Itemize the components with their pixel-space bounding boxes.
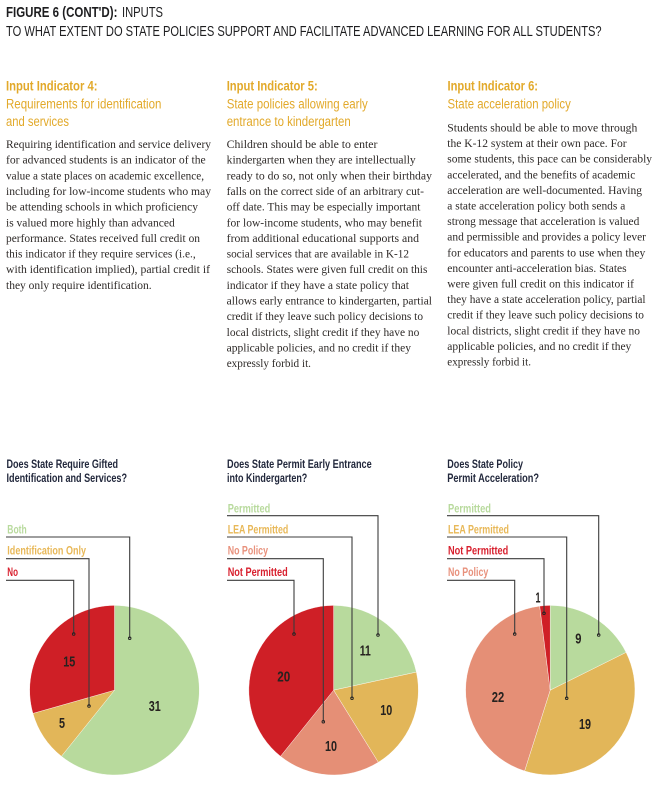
legend: gifted identification: Both <box>7 525 27 537</box>
text block: indicator 5 description: applicable policies, and no credit if they <box>227 342 411 354</box>
text block: indicator 6 description: strong message that acceleration is valued <box>447 216 640 228</box>
text block: indicator 6 description: for educators and parents to use when they <box>447 247 646 259</box>
pie chart: gifted identification <box>30 605 199 775</box>
heading: indicator 6: Input Indicator 6: <box>448 79 538 94</box>
values: acceleration policy: 9 <box>575 630 581 648</box>
text block: indicator 5 description: expressly forbid it. <box>227 358 311 370</box>
text block: indicator 5 description: schools. States were given full credit on this <box>227 264 428 276</box>
heading: indicator 6 <box>448 79 571 111</box>
pie chart: early entrance <box>249 605 418 775</box>
text block: indicator 6 description: acceleration are well-documented. Having <box>447 185 642 197</box>
text block: indicator 6 description: the K-12 system at their own pace. For <box>447 138 627 150</box>
legend: acceleration policy: Not Permitted <box>448 546 508 558</box>
text block: indicator 4 description: is valued more highly than advanced <box>6 217 175 229</box>
heading: indicator 4: Input Indicator 4: <box>6 79 98 94</box>
heading: indicator 6: State acceleration policy <box>448 96 571 111</box>
values: acceleration policy: 22 <box>492 689 504 706</box>
chart title: acceleration policy: Permit Acceleration? <box>447 473 539 485</box>
text block: indicator 6 description <box>447 122 652 368</box>
title: FIGURE 6 (CONT'D): <box>6 5 117 21</box>
text block: indicator 5 description: for low-income students, who may benefit <box>227 217 423 229</box>
chart title: acceleration policy: Does State Policy <box>447 459 523 471</box>
text block: indicator 4 description: this indicator if they require services (i.e., <box>6 249 196 261</box>
text block: indicator 4 description: for advanced students is an indicator of the <box>6 155 206 167</box>
chart title: early entrance: into Kindergarten? <box>227 473 307 485</box>
legend: gifted identification: No <box>7 567 18 579</box>
values: early entrance: 10 <box>380 702 392 719</box>
text block: indicator 4 description: performance. States received full credit on <box>6 233 200 245</box>
values: acceleration policy: 1 <box>536 590 540 606</box>
title: INPUTS <box>122 5 163 21</box>
heading: indicator 4: and services <box>6 114 69 129</box>
legend: acceleration policy: LEA Permitted <box>448 525 509 537</box>
text block: indicator 4 description: Requiring identification and service delivery <box>6 139 211 151</box>
text block: indicator 6 description: were given full credit on this indicator if <box>447 278 634 290</box>
values: gifted identification: 5 <box>59 715 65 732</box>
text block: indicator 5 description: social services that are available in K-12 <box>227 249 409 261</box>
text block: indicator 4 description: including for low-income students who may <box>6 186 211 198</box>
leader lines: gifted identification <box>6 537 131 707</box>
chart title: acceleration policy <box>447 459 539 485</box>
values: acceleration policy <box>492 590 591 733</box>
chart title: early entrance: Does State Permit Early Entrance <box>227 459 372 471</box>
values: gifted identification: 15 <box>63 654 75 670</box>
chart title: gifted identification: Does State Require Gifted <box>6 459 118 471</box>
text block: indicator 4 description: with identification implied), partial credit if <box>6 264 210 276</box>
panel: input indicator 5 <box>227 79 432 370</box>
panel: early entrance pie chart <box>227 459 418 775</box>
text block: indicator 6 description: expressly forbid it. <box>447 356 531 368</box>
legend: early entrance: LEA Permitted <box>228 525 288 537</box>
text block: indicator 6 description: they have a state acceleration policy, partial <box>447 294 646 306</box>
text block: indicator 6 description: accelerated, and the benefits of academic <box>447 169 635 181</box>
text block: indicator 5 description: from additional educational supports and <box>227 233 419 245</box>
legend: acceleration policy: Permitted <box>448 504 491 516</box>
legend: early entrance: No Policy <box>228 546 268 558</box>
text block: indicator 6 description: credit if they leave such policy decisions to <box>447 310 644 322</box>
heading: indicator 5 <box>227 79 368 129</box>
legend: acceleration policy: No Policy <box>448 567 489 579</box>
text block: indicator 6 description: encounter anti-acceleration bias. States <box>447 263 627 275</box>
values: early entrance <box>277 642 392 755</box>
values: early entrance: 10 <box>325 738 337 755</box>
text block: indicator 4 description <box>6 139 211 292</box>
values: early entrance: 20 <box>277 668 290 686</box>
text block: indicator 5 description: falls on the correct side of an arbitrary cut- <box>227 186 424 198</box>
heading: indicator 5: entrance to kindergarten <box>227 114 351 129</box>
legend: gifted identification <box>7 525 86 579</box>
panel: gifted identification pie chart <box>6 459 199 775</box>
chart title: early entrance <box>227 459 372 485</box>
panel: input indicator 4 <box>6 79 211 292</box>
leader lines: early entrance <box>227 516 379 723</box>
text block: indicator 6 description: some students, this pace can be considerably <box>447 154 652 166</box>
heading: indicator 4 <box>6 79 161 129</box>
text block: indicator 5 description <box>227 139 432 370</box>
text block: indicator 5 description: allows early entrance to kindergarten, partial <box>227 296 432 308</box>
text block: indicator 5 description: indicator if they have a state policy that <box>227 280 410 292</box>
text block: indicator 6 description: Students should be able to move through <box>447 122 638 134</box>
chart title: gifted identification <box>6 459 127 485</box>
text block: indicator 5 description: ready to do so, not only when their birthday <box>227 170 432 182</box>
pie chart: acceleration policy <box>466 605 635 775</box>
text block: indicator 6 description: and permissible and provides a policy lever <box>447 232 646 244</box>
text block: indicator 4 description: they only require identification. <box>6 280 152 292</box>
heading: indicator 5: State policies allowing early <box>227 96 368 111</box>
legend: gifted identification: Identification Only <box>7 546 86 558</box>
heading: indicator 4: Requirements for identification <box>6 96 161 111</box>
heading: indicator 5: Input Indicator 5: <box>227 79 318 94</box>
legend: early entrance: Not Permitted <box>228 567 288 579</box>
legend: early entrance: Permitted <box>228 504 270 516</box>
panel: acceleration policy pie chart <box>447 459 635 775</box>
text block: indicator 5 description: off date. This may be especially important <box>227 202 421 214</box>
text block: indicator 5 description: credit if they leave such policy decisions to <box>227 311 423 323</box>
panel: input indicator 6 <box>447 79 652 368</box>
values: gifted identification: 31 <box>149 698 161 715</box>
legend: acceleration policy <box>448 504 509 579</box>
leader lines: acceleration policy <box>447 516 600 700</box>
text block: indicator 4 description: value a state places on academic excellence, <box>6 170 204 182</box>
chart title: gifted identification: Identification and Services? <box>6 473 127 485</box>
text block: indicator 4 description: be attending schools in which proficiency <box>6 202 198 214</box>
text block: indicator 5 description: kindergarten when they are intellectually <box>227 155 416 167</box>
text block: indicator 5 description: Children should be able to enter <box>227 139 378 151</box>
text block: indicator 6 description: a state acceleration policy both sends a <box>447 200 625 212</box>
title <box>6 5 602 40</box>
legend: early entrance <box>228 504 288 579</box>
text block: indicator 5 description: local districts, slight credit if they have no <box>227 327 420 339</box>
text block: indicator 6 description: applicable policies, and no credit if they <box>447 341 632 353</box>
values: acceleration policy: 19 <box>579 716 591 733</box>
values: gifted identification <box>59 654 161 732</box>
values: early entrance: 11 <box>360 642 371 660</box>
text block: indicator 6 description: local districts, slight credit if they have no <box>447 325 640 337</box>
